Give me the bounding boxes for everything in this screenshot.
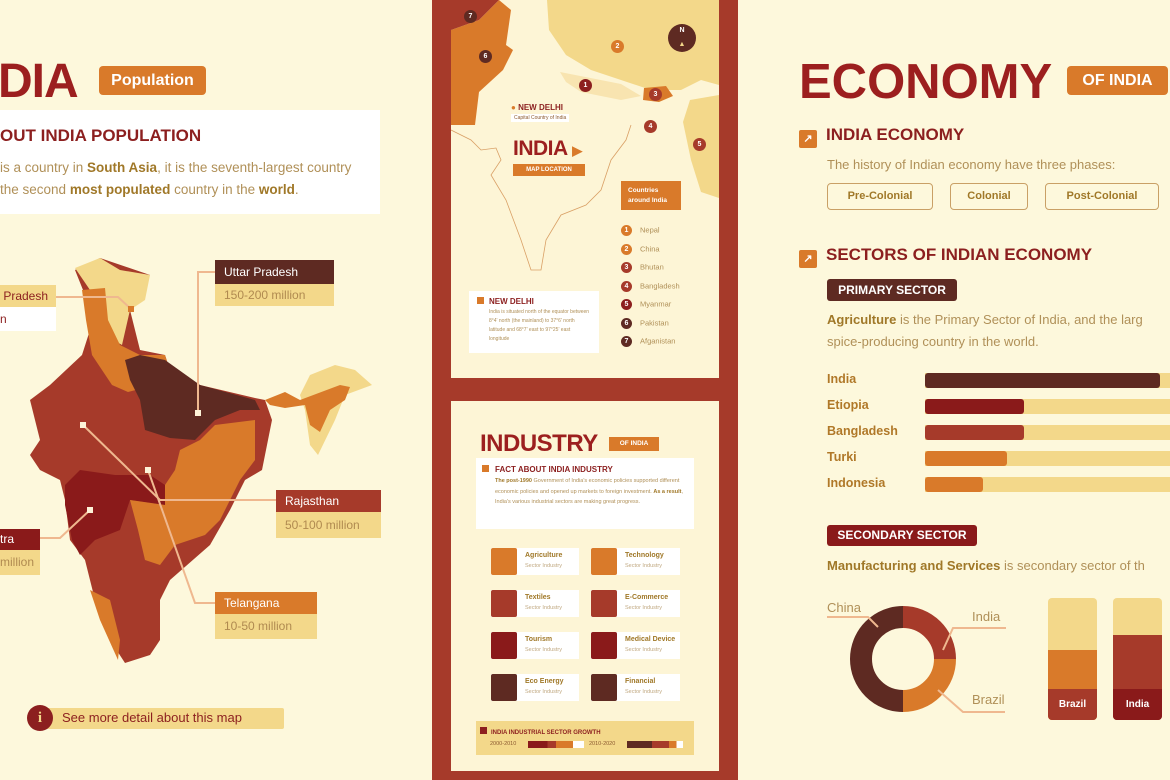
chart: industrial sector growth: 2000-2010 [490,741,516,747]
label: uttar pradesh: Uttar Pradesh [224,265,298,279]
text: manufacturing: Manufacturing and Services is secondary sector of th [827,558,1145,573]
chart: industrial sector growth: 2010-2020 [589,741,615,747]
country markers: 5 [698,141,701,148]
badge: secondary sector [827,525,977,546]
list: countries: Bhutan [640,262,664,271]
list: industry sectors: Sector Industry [525,689,562,695]
list: industry sectors: Textiles [525,594,551,601]
callout: countries around india: Countries around India [628,187,667,204]
bar chart: spice production [827,372,1170,492]
callout: countries around india [621,181,681,210]
map: india states [30,258,372,663]
list: countries: Myanmar [640,299,671,308]
map: neighbours [451,0,719,270]
list: countries: Bangladesh [640,281,680,290]
text block: about india population [0,110,380,214]
list: industry sectors: Sector Industry [625,563,662,569]
bar chart: spice production: India [827,372,856,386]
panel: map location [451,0,719,378]
list: industry sectors: Eco Energy [525,678,564,685]
text block: new delhi: NEW DELHI [489,297,534,306]
left section: India population [0,55,381,731]
list: countries: 1 [625,227,628,234]
list: countries: Nepal [640,225,660,234]
chart: industrial sector growth [476,721,694,755]
list: industry sectors: Sector Industry [625,647,662,653]
label: pradesh (left) [0,285,56,331]
label: rajasthan: Rajasthan [285,494,339,508]
chart: industrial sector growth: INDIA INDUSTRIAL SECTOR GROWTH [491,730,601,736]
label: maharashtra: million [0,555,34,569]
label: telangana: Telangana [224,596,279,610]
list: countries: 3 [625,264,628,271]
text block: new delhi: India is situated north of the equator between 8°4' north (the mainland) to 37°6' north latitude and 68°7' east to 97°25' east longitude [489,309,589,342]
title: india map location: MAP LOCATION [526,167,572,173]
label: pradesh (left): n [0,312,7,326]
country markers: 1 [584,82,587,89]
list: countries: 2 [625,246,628,252]
text block: fact about india industry: The post-1990 Government of India's economic policies supported different economic policies and opened up markets to foreign investment. As a result, India's various industrial sectors are making great progress. [495,478,683,505]
donut chart: India [972,609,1001,624]
badge: population [99,66,206,95]
donut chart: China [827,600,862,615]
badge: population: Population [111,72,194,89]
text block: new delhi [469,291,599,353]
list: industry sectors: E-Commerce [625,594,668,601]
buttons: phases: Colonial [967,190,1011,202]
list: industry sectors: Sector Industry [525,605,562,611]
list: countries: Pakistan [640,318,669,327]
text: agriculture: spice-producing country in the world. [827,334,1039,349]
callout: see more detail: See more detail about this map [62,710,242,725]
list: industry sectors: Tourism [525,636,552,643]
heading: india economy [799,125,964,148]
buttons: phases [827,183,1159,210]
list: industry sectors: Agriculture [525,552,562,559]
text: three phases: The history of Indian economy have three phases: [827,157,1115,172]
list: industry sectors [491,548,680,701]
country markers [464,10,706,151]
label: new delhi capital: Capital Country of India [514,115,566,121]
list: industry sectors: Sector Industry [525,647,562,653]
country markers: 6 [484,53,487,60]
column chart: brazil: Brazil [1059,699,1086,710]
icon: compass: ▲ [679,41,685,48]
callout: see more detail: i [38,710,42,726]
title: india map location [513,137,585,176]
list: industry sectors: Sector Industry [625,605,662,611]
country markers: 3 [654,91,657,98]
column chart: brazil [1048,598,1097,720]
column chart: india [1113,598,1162,720]
label: uttar pradesh: 150-200 million [224,288,305,302]
label: rajasthan: 50-100 million [285,518,360,532]
list: countries: 4 [625,282,628,290]
label: telangana: 10-50 million [224,619,292,633]
title: economy: ECONOMY [799,55,1052,109]
badge: primary sector: PRIMARY SECTOR [838,283,946,297]
label: pradesh (left): Pradesh [3,289,48,303]
list: countries: 7 [625,338,628,345]
panel: industry [451,401,719,771]
list: countries: 6 [625,320,628,326]
country markers: 4 [649,123,652,130]
bar chart: spice production: Turki [827,450,857,464]
text block: fact about india industry [476,458,694,529]
country markers: 2 [616,43,619,50]
center band [432,0,738,780]
label: rajasthan [276,490,381,538]
callout: see more detail [27,705,284,731]
right section: economy [799,55,1170,720]
title: industry: INDUSTRY [480,430,598,457]
list: industry sectors: Technology [625,552,664,559]
title: india map location: INDIA ▶ [513,137,582,160]
list: countries: 5 [625,301,628,308]
icon: compass: N [679,27,685,34]
text: agriculture [827,312,1143,349]
text: agriculture: Agriculture is the Primary Sector of India, and the larg [827,312,1143,327]
text block: about india population: is a country in South Asia, it is the seventh-largest country [0,160,351,175]
column chart: india: India [1126,699,1149,710]
text block: about india population: OUT INDIA POPULATION [0,126,201,145]
bar chart: spice production: Indonesia [827,476,885,490]
country markers: 7 [469,13,472,20]
buttons: phases: Post-Colonial [1067,190,1137,202]
bar chart: spice production: Etiopia [827,398,869,412]
list: industry sectors: Sector Industry [625,689,662,695]
icon: compass [668,24,696,52]
label: new delhi capital: ● NEW DELHI [511,103,563,112]
list: countries [621,225,680,347]
label: telangana [215,592,317,639]
heading: india economy: INDIA ECONOMY [826,125,964,144]
badge: of india: OF INDIA [1082,72,1153,89]
badge: secondary sector: SECONDARY SECTOR [837,528,967,542]
text block: fact about india industry: FACT ABOUT INDIA INDUSTRY [495,465,613,474]
title: DIA [0,55,78,108]
buttons: phases: Pre-Colonial [848,190,912,202]
list: countries: Afganistan [640,336,675,345]
badge: of india: OF INDIA [620,440,648,447]
list: industry sectors: Financial [625,678,655,685]
heading: sectors: ↗ [803,253,813,265]
donut chart: Brazil [972,692,1005,707]
badge: of india [609,437,659,451]
heading: sectors: SECTORS OF INDIAN ECONOMY [826,245,1092,264]
label: new delhi capital [511,103,569,122]
bar chart: spice production: Bangladesh [827,424,898,438]
heading: india economy: ↗ [803,133,813,145]
label: maharashtra [0,529,40,575]
list: countries: China [640,244,660,253]
label: maharashtra: tra [0,532,14,546]
list: industry sectors: Medical Device [625,636,675,643]
badge: of india [1067,66,1168,95]
badge: primary sector [827,279,957,301]
donut chart [827,600,1006,713]
list: industry sectors: Sector Industry [525,563,562,569]
text block: about india population: the second most populated country in the world. [0,182,299,197]
label: uttar pradesh [215,260,334,306]
